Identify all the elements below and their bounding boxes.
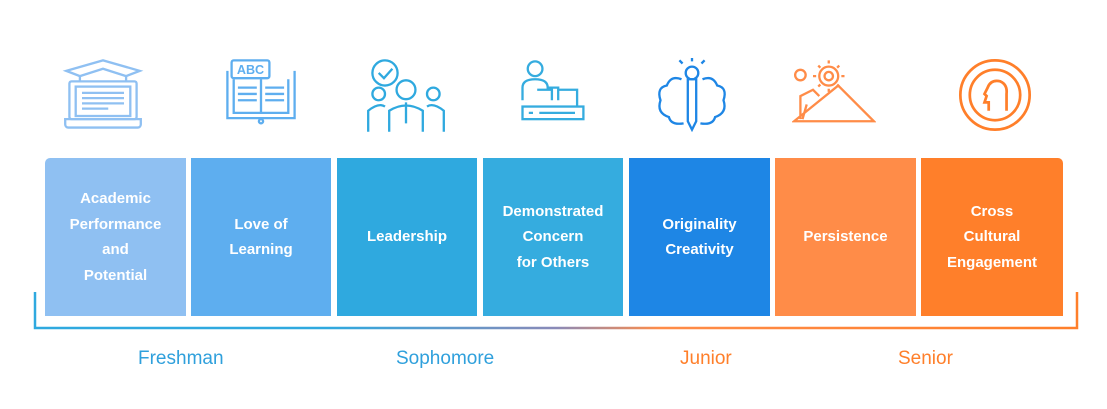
bracket line: [34, 292, 1078, 330]
label: Junior: Junior: [680, 348, 732, 369]
label: Freshman: Freshman: [138, 348, 224, 369]
box: Cross Cultural Engagement: Cross: [971, 203, 1013, 220]
box: Leadership: [337, 158, 477, 316]
box: Originality Creativity: Originality: [662, 216, 737, 232]
box: Love of Learning: Learning: [229, 241, 293, 258]
box: Persistence: Persistence: [803, 228, 888, 245]
box: Persistence: [775, 158, 916, 316]
icon: person at desk: [521, 60, 585, 120]
box: Academic Performance: Potential: [84, 266, 147, 284]
icon: leadership group: [367, 59, 445, 132]
box: Originality Creativity: Creativity: [665, 241, 734, 258]
icon: laptop graduation: [62, 59, 144, 129]
label: Sophomore: Sophomore: [396, 348, 494, 369]
box: Love of Learning: [191, 158, 331, 316]
icon: ABC book: ABC: [237, 63, 264, 77]
icon: ABC book: [226, 59, 296, 124]
box: Academic Performance: Performance: [70, 216, 161, 232]
label: Senior: Senior: [898, 348, 953, 369]
box: Academic Performance: Academic: [80, 190, 151, 207]
box: Love of Learning: Love of: [234, 216, 288, 232]
box: Leadership: Leadership: [367, 228, 447, 245]
box: Demonstrated Concern: [483, 158, 623, 316]
icon: climber gear: [792, 60, 876, 122]
box: Academic Performance: and: [102, 241, 129, 258]
box: Academic Performance: [45, 158, 186, 316]
box: Cross Cultural Engagement: [921, 158, 1063, 316]
icon: head circle: [959, 59, 1031, 131]
box: Cross Cultural Engagement: Engagement: [947, 254, 1037, 271]
box: Demonstrated Concern: Concern: [523, 228, 583, 245]
box: Originality Creativity: [629, 158, 770, 316]
box: Cross Cultural Engagement: Cultural: [964, 228, 1020, 245]
box: Demonstrated Concern: Demonstrated: [503, 203, 603, 220]
box: Demonstrated Concern: for Others: [517, 254, 589, 271]
icon: brain pencil: [658, 58, 726, 132]
